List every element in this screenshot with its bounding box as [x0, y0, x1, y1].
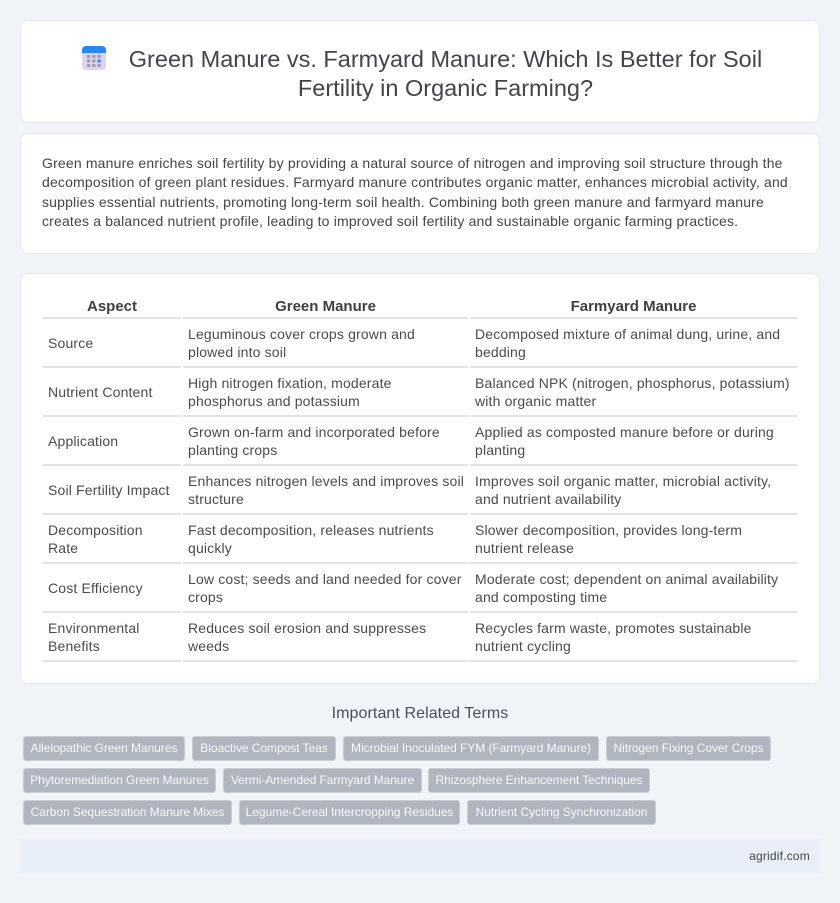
row: nutrient content: Nutrient Content: [48, 384, 153, 400]
application: green manure: [188, 424, 440, 458]
application: farmyard manure: [475, 424, 774, 458]
row: soil fertility impact: Soil Fertility Impact: [48, 482, 170, 498]
tag: allelopathic green manures: [23, 736, 185, 761]
nutrient content: green manure: phosphorus and potassium: [188, 393, 360, 409]
row: application: Application: [48, 433, 118, 449]
cost efficiency: green manure: crops: [188, 589, 223, 605]
nutrient content: farmyard manure: with organic matter: [475, 393, 596, 409]
nutrient content: green manure: High nitrogen fixation, moderate: [188, 375, 392, 391]
cost efficiency: green manure: [188, 571, 462, 605]
decomposition rate: farmyard manure: Slower decomposition, provides long-term: [475, 522, 742, 538]
decomposition rate: green manure: [188, 522, 434, 556]
cost efficiency: farmyard manure: Moderate cost; dependent on animal availability: [475, 571, 778, 587]
environmental benefits: farmyard manure: Recycles farm waste, promotes sustainable: [475, 620, 752, 636]
cost efficiency: green manure: Low cost; seeds and land needed for cover: [188, 571, 462, 587]
cost efficiency: farmyard manure: [475, 571, 778, 605]
row: decomposition rate: Decomposition: [48, 522, 143, 538]
soil fertility impact: green manure: [188, 473, 464, 507]
decomposition rate: green manure: Fast decomposition, releases nutrients: [188, 522, 434, 538]
nutrient content: green manure: [188, 375, 392, 409]
environmental benefits: green manure: weeds: [188, 638, 229, 654]
title: [129, 46, 762, 101]
decomposition rate: farmyard manure: [475, 522, 742, 556]
title: Fertility in Organic Farming?: [298, 75, 593, 101]
nutrient content: farmyard manure: [475, 375, 790, 409]
soil fertility impact: farmyard manure: Improves soil organic matter, microbial activity,: [475, 473, 771, 489]
summary text: supplies essential nutrients, promoting long-term soil health. Combining both green manure and farmyard manure: [42, 194, 764, 210]
row: decomposition rate: Rate: [48, 540, 78, 556]
soil fertility impact: farmyard manure: [475, 473, 771, 507]
soil fertility impact: green manure: Enhances nitrogen levels and improves soil: [188, 473, 464, 489]
environmental benefits: farmyard manure: [475, 620, 752, 654]
table header: green manure: Green Manure: [275, 298, 376, 315]
panel: comparison table: [20, 273, 820, 684]
row: source: Source: [48, 335, 93, 351]
environmental benefits: green manure: Reduces soil erosion and suppresses: [188, 620, 426, 636]
panel: header: [20, 20, 820, 123]
heading: related terms: Important Related Terms: [332, 705, 508, 722]
tag: nitrogen fixing cover crops: [606, 736, 771, 761]
summary text: decomposition of green plant residues. Farmyard manure contributes organic matter, enhances microbial activity, and: [42, 174, 788, 190]
summary text: [42, 155, 788, 229]
tag: rhizosphere enhancement techniques: [428, 768, 650, 793]
tag: vermi-amended farmyard manure: [223, 768, 422, 793]
nutrient content: farmyard manure: Balanced NPK (nitrogen, phosphorus, potassium): [475, 375, 790, 391]
environmental benefits: farmyard manure: nutrient cycling: [475, 638, 571, 654]
row: environmental benefits: [48, 620, 140, 654]
tag: bioactive compost teas: [192, 736, 336, 761]
decomposition rate: farmyard manure: nutrient release: [475, 540, 574, 556]
soil fertility impact: farmyard manure: and nutrient availability: [475, 491, 621, 507]
tag: nitrogen fixing cover crops: Nitrogen Fixing Cover Crops: [613, 741, 764, 755]
tag: allelopathic green manures: Allelopathic Green Manures: [31, 741, 177, 755]
tag: microbial inoculated fym: Microbial Inoculated FYM (Farmyard Manure): [351, 741, 591, 755]
row: environmental benefits: Environmental: [48, 620, 140, 636]
summary text: Green manure enriches soil fertility by providing a natural source of nitrogen and improving soil structure through the: [42, 155, 783, 171]
source: farmyard manure: Decomposed mixture of animal dung, urine, and: [475, 326, 780, 342]
panel: summary: [20, 133, 820, 254]
application: farmyard manure: Applied as composted manure before or during: [475, 424, 774, 440]
application: farmyard manure: planting: [475, 442, 525, 458]
tag: legume-cereal intercropping residues: Legume-Cereal Intercropping Residues: [246, 805, 453, 819]
panel: related term tags: [23, 736, 771, 825]
row: environmental benefits: Benefits: [48, 638, 100, 654]
cost efficiency: farmyard manure: and composting time: [475, 589, 607, 605]
tag: phytoremediation green manures: Phytoremediation Green Manures: [30, 773, 209, 787]
tag: bioactive compost teas: Bioactive Compost Teas: [200, 741, 328, 755]
tag: legume-cereal intercropping residues: [239, 800, 460, 825]
row: cost efficiency: Cost Efficiency: [48, 580, 143, 596]
tag: microbial inoculated fym: [343, 736, 599, 761]
title: Green Manure vs. Farmyard Manure: Which Is Better for Soil: [129, 46, 762, 72]
source: green manure: [188, 326, 415, 360]
footer: site name: agridif.com: [749, 849, 810, 863]
table header: aspect: Aspect: [87, 298, 137, 315]
tag: carbon sequestration manure mixes: Carbon Sequestration Manure Mixes: [31, 805, 224, 819]
source: green manure: plowed into soil: [188, 344, 286, 360]
tag: vermi-amended farmyard manure: Vermi-Amended Farmyard Manure: [231, 773, 414, 787]
tag: carbon sequestration manure mixes: [23, 800, 232, 825]
decomposition rate: green manure: quickly: [188, 540, 232, 556]
tag: rhizosphere enhancement techniques: Rhizosphere Enhancement Techniques: [436, 773, 642, 787]
row: decomposition rate: [48, 522, 143, 556]
table header: farmyard manure: Farmyard Manure: [571, 298, 696, 315]
icon: calendar: [82, 46, 106, 70]
source: green manure: Leguminous cover crops grown and: [188, 326, 415, 342]
tag: nutrient cycling synchronization: Nutrient Cycling Synchronization: [476, 805, 647, 819]
source: farmyard manure: [475, 326, 780, 360]
application: green manure: planting crops: [188, 442, 277, 458]
footer bar: [20, 839, 820, 873]
application: green manure: Grown on-farm and incorporated before: [188, 424, 440, 440]
soil fertility impact: green manure: structure: [188, 491, 244, 507]
summary text: creates a balanced nutrient profile, leading to improved soil fertility and sustainable organic farming practices.: [42, 213, 738, 229]
tag: phytoremediation green manures: [23, 768, 216, 793]
tag: nutrient cycling synchronization: [467, 800, 656, 825]
source: farmyard manure: bedding: [475, 344, 526, 360]
environmental benefits: green manure: [188, 620, 426, 654]
